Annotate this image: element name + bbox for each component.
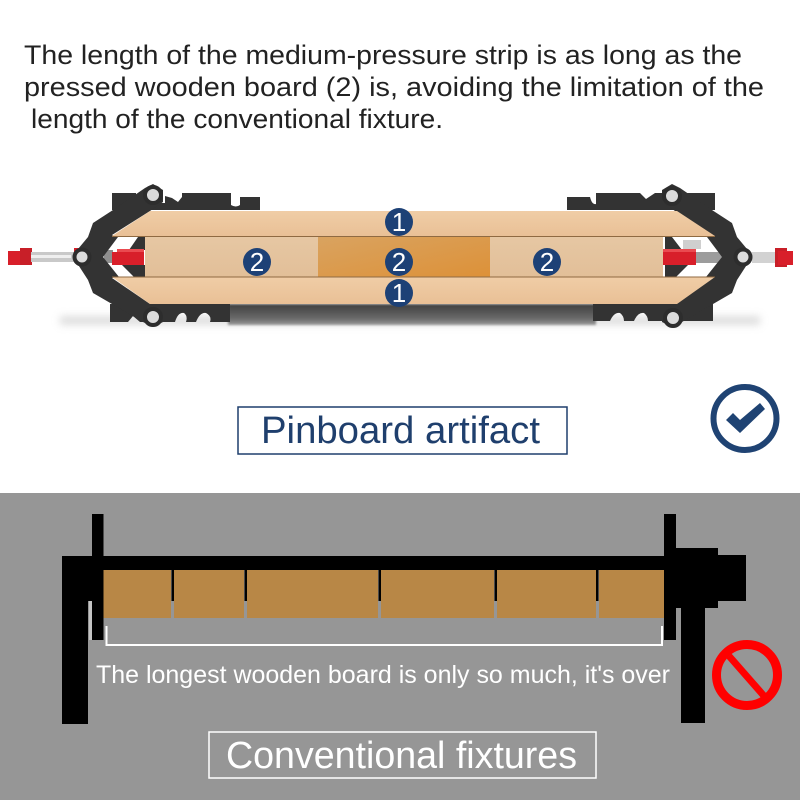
number badges: 2 bbox=[540, 247, 554, 277]
middle board left bbox=[145, 237, 318, 277]
icon: check mark bbox=[714, 387, 776, 450]
icon: prohibited bbox=[716, 644, 778, 706]
dark strip under boards bbox=[228, 304, 596, 325]
length bracket bbox=[106, 626, 662, 645]
number badges: 1 bbox=[392, 278, 406, 308]
right bottom jaw block bbox=[593, 304, 713, 321]
heading text: pressed wooden board (2) is, avoiding the limitation of the bbox=[24, 72, 764, 102]
board gaps bbox=[172, 570, 598, 601]
arm pins bbox=[74, 187, 750, 326]
number badges: 2 bbox=[392, 247, 406, 277]
panel: conventional fixtures bbox=[0, 493, 800, 800]
inner jaw pieces bbox=[122, 237, 145, 277]
top board bbox=[112, 211, 715, 236]
heading text bbox=[24, 40, 764, 134]
left bottom jaw block bbox=[110, 304, 230, 322]
bracket caption: The longest wooden board is only so much, it's over bbox=[96, 661, 670, 689]
left clamp arm bbox=[73, 184, 163, 327]
wood boards bbox=[112, 211, 715, 304]
left top jaw block bbox=[112, 193, 260, 210]
right top jaw block bbox=[567, 193, 715, 210]
heading text: length of the conventional fixture. bbox=[31, 104, 443, 134]
middle board center bbox=[318, 237, 490, 277]
fixture diagram bbox=[62, 514, 746, 724]
number badges: 2 bbox=[250, 247, 264, 277]
wooden boards bbox=[104, 570, 664, 618]
left screw bbox=[8, 237, 145, 277]
right clamp arm bbox=[662, 184, 752, 327]
pinboard clamp illustration bbox=[8, 184, 793, 327]
bottom board bbox=[112, 277, 715, 304]
label: conventional fixtures: Conventional fixtures bbox=[226, 735, 577, 777]
middle board right bbox=[490, 237, 663, 277]
heading text: The length of the medium-pressure strip is as long as the bbox=[24, 40, 742, 70]
right screw bbox=[663, 237, 793, 277]
ground shadow bbox=[60, 316, 760, 325]
label: pinboard artifact: Pinboard artifact bbox=[261, 410, 540, 452]
number badges bbox=[243, 207, 561, 308]
number badges: 1 bbox=[392, 207, 406, 237]
